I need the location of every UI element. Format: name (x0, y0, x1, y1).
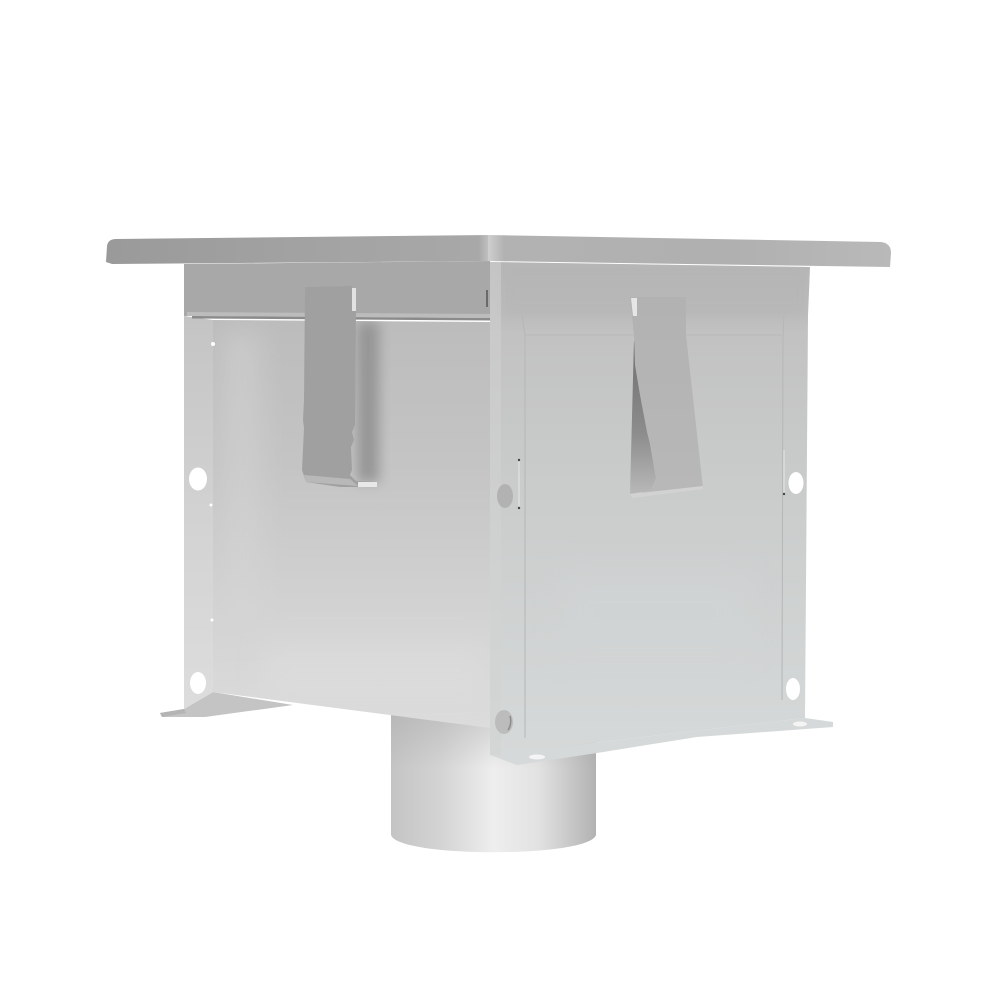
right clip tab (630, 297, 703, 498)
pipe (391, 700, 596, 852)
top lid (106, 235, 891, 267)
right foot flange (490, 718, 833, 765)
left clip tab (302, 286, 377, 487)
left panel (184, 261, 490, 728)
product illustration: metal box with pipe (106, 235, 891, 852)
left foot flange (160, 692, 293, 717)
right panel (490, 262, 810, 755)
